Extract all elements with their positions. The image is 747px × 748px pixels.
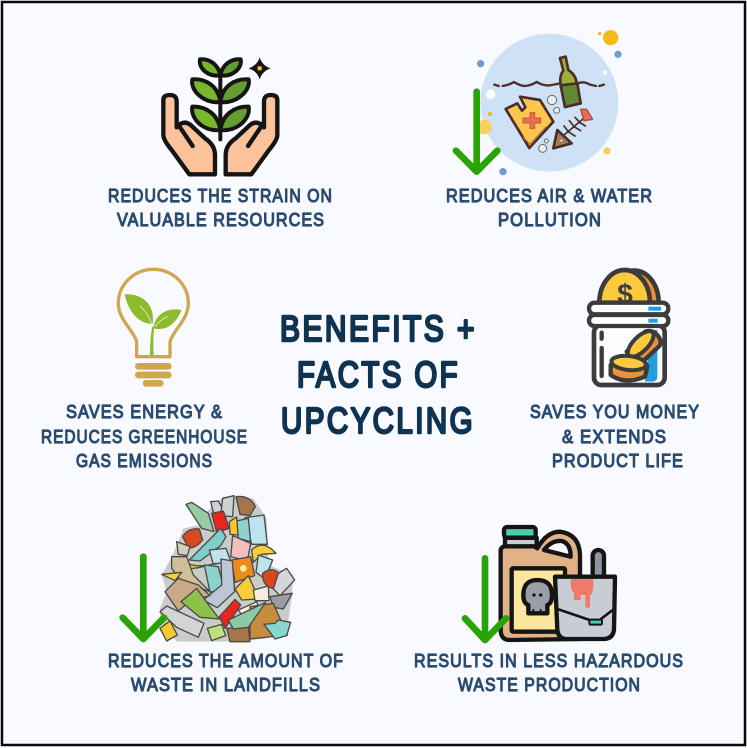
caption: saves energy [41, 401, 248, 471]
caption: reduces the strain [108, 185, 333, 230]
caption: hazardous waste [414, 650, 684, 695]
caption: reduces air and water pollution: POLLUTION [498, 209, 602, 230]
waves [494, 82, 604, 86]
caption: saves you money [530, 401, 700, 471]
caption: saves energy: SAVES ENERGY & [66, 401, 223, 422]
bottle [560, 57, 581, 107]
title: BENEFITS + [280, 308, 477, 349]
shirt [506, 97, 553, 148]
icon: light bulb with sprout [118, 269, 188, 387]
caption: reduces waste in landfills: WASTE IN LANDFILLS [131, 674, 321, 695]
icon: water pollution with down arrow [456, 30, 622, 175]
caption: saves energy: REDUCES GREENHOUSE [41, 426, 248, 447]
title: FACTS OF [297, 354, 460, 395]
caption: reduces air and water pollution: REDUCES AIR & WATER [446, 185, 653, 206]
icon: hazardous chemicals with down arrow [465, 527, 615, 640]
caption: saves you money: SAVES YOU MONEY [530, 401, 700, 422]
title [280, 308, 477, 441]
caption: reduces air and water pollution [446, 185, 653, 230]
caption: saves you money: & EXTENDS [562, 426, 667, 447]
title: UPCYCLING [281, 400, 475, 441]
caption: hazardous waste: WASTE PRODUCTION [458, 674, 641, 695]
caption: reduces waste in landfills [108, 650, 344, 695]
caption: reduces the strain: VALUABLE RESOURCES [117, 209, 325, 230]
icon: jar of coins: $ [617, 278, 633, 309]
fish [553, 130, 572, 148]
icon: landfill trash pile with down arrow [123, 496, 295, 642]
icon: jar of coins [589, 270, 668, 385]
caption: saves you money: PRODUCT LIFE [552, 450, 684, 471]
caption: hazardous waste: RESULTS IN LESS HAZARDOUS [414, 650, 684, 671]
caption: reduces the strain: REDUCES THE STRAIN ON [108, 185, 333, 206]
caption: saves energy: GAS EMISSIONS [76, 450, 213, 471]
caption: reduces waste in landfills: REDUCES THE AMOUNT OF [108, 650, 344, 671]
icon: hands holding plant [163, 57, 277, 174]
bubbles [547, 95, 557, 105]
